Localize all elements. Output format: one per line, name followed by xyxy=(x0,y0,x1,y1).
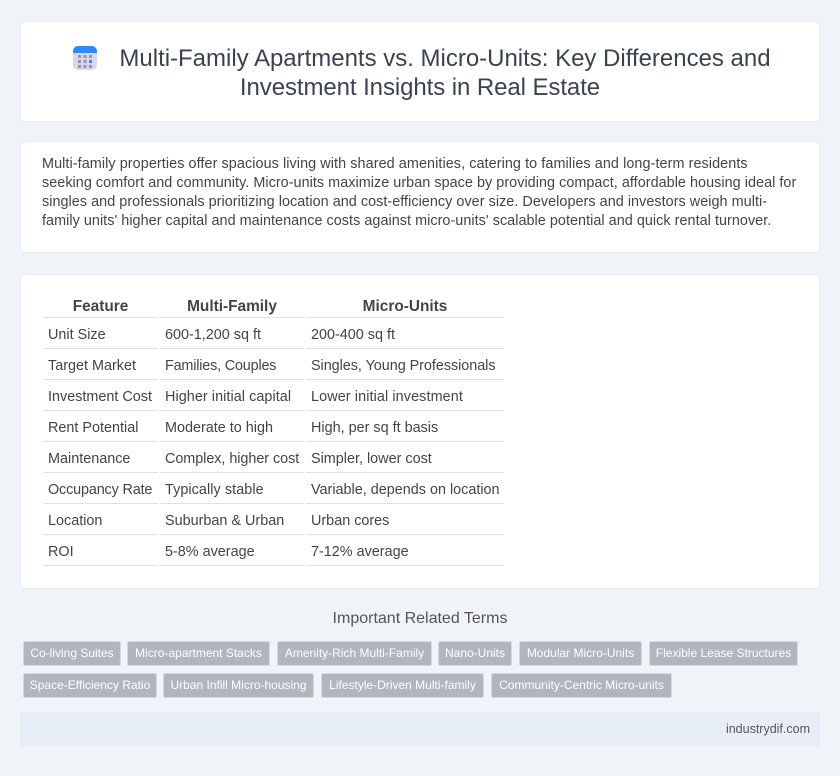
related terms tags: Modular Micro-Units xyxy=(527,646,634,660)
related terms tags: Flexible Lease Structures xyxy=(656,646,791,660)
comparison table: 600-1,200 sq ft xyxy=(165,327,261,343)
comparison table: High, per sq ft basis xyxy=(311,420,438,436)
intro text: singles and professionals prioritizing location and cost-efficiency over size. Developers and investors weigh multi- xyxy=(42,194,767,210)
related terms heading: Important Related Terms xyxy=(333,610,507,627)
related terms tags: Community-Centric Micro-units xyxy=(499,678,664,692)
comparison table: Investment Cost xyxy=(48,389,152,405)
comparison table: Families, Couples xyxy=(165,358,276,374)
related terms tags: Co-living Suites xyxy=(30,646,114,660)
comparison table: Moderate to high xyxy=(165,420,273,436)
comparison table: Occupancy Rate xyxy=(48,482,152,498)
comparison table: Location xyxy=(48,513,102,529)
comparison table: Lower initial investment xyxy=(311,389,463,405)
title xyxy=(119,45,771,101)
icon: calendar building xyxy=(73,46,97,70)
title: Investment Insights in Real Estate xyxy=(240,74,600,101)
related terms tags: Micro-apartment Stacks xyxy=(135,646,262,660)
intro text: seeking comfort and community. Micro-units maximize urban space by providing compact, affordable housing ideal for xyxy=(42,175,796,191)
related terms tags: Urban Infill Micro-housing xyxy=(170,678,307,692)
title: Multi-Family Apartments vs. Micro-Units: Key Differences and xyxy=(119,45,771,72)
comparison table: Micro-Units xyxy=(363,298,447,315)
comparison table xyxy=(43,298,504,566)
related terms tags: Amenity-Rich Multi-Family xyxy=(285,646,424,660)
comparison table: 7-12% average xyxy=(311,544,409,560)
comparison table: Typically stable xyxy=(165,482,264,498)
comparison table: Urban cores xyxy=(311,513,389,529)
intro panel xyxy=(20,141,820,253)
comparison table: Unit Size xyxy=(48,327,106,343)
related terms tags xyxy=(23,641,798,698)
comparison table: Higher initial capital xyxy=(165,389,291,405)
header panel xyxy=(20,21,820,122)
intro text xyxy=(42,156,796,229)
comparison table: Complex, higher cost xyxy=(165,451,299,467)
comparison table: Variable, depends on location xyxy=(311,482,500,498)
comparison table: ROI xyxy=(48,544,74,560)
comparison table: Target Market xyxy=(48,358,136,374)
intro text: Multi-family properties offer spacious living with shared amenities, catering to families and long-term residents xyxy=(42,156,748,172)
comparison table: Singles, Young Professionals xyxy=(311,358,496,374)
comparison table: Multi-Family xyxy=(187,298,277,315)
comparison table: Suburban & Urban xyxy=(165,513,284,529)
comparison table: Feature xyxy=(73,298,128,315)
comparison panel xyxy=(20,274,820,589)
footer bar xyxy=(20,712,820,746)
comparison table: Simpler, lower cost xyxy=(311,451,432,467)
related terms tags: Space-Efficiency Ratio xyxy=(30,678,150,692)
intro text: family units' higher capital and maintenance costs against micro-units' scalable potential and quick rental turnover. xyxy=(42,213,771,229)
comparison table: 200-400 sq ft xyxy=(311,327,395,343)
comparison table: Rent Potential xyxy=(48,420,138,436)
related terms tags: Lifestyle-Driven Multi-family xyxy=(329,678,476,692)
footer source text: industrydif.com xyxy=(726,722,810,736)
comparison table: Maintenance xyxy=(48,451,130,467)
related terms tags: Nano-Units xyxy=(445,646,505,660)
comparison table: 5-8% average xyxy=(165,544,255,560)
